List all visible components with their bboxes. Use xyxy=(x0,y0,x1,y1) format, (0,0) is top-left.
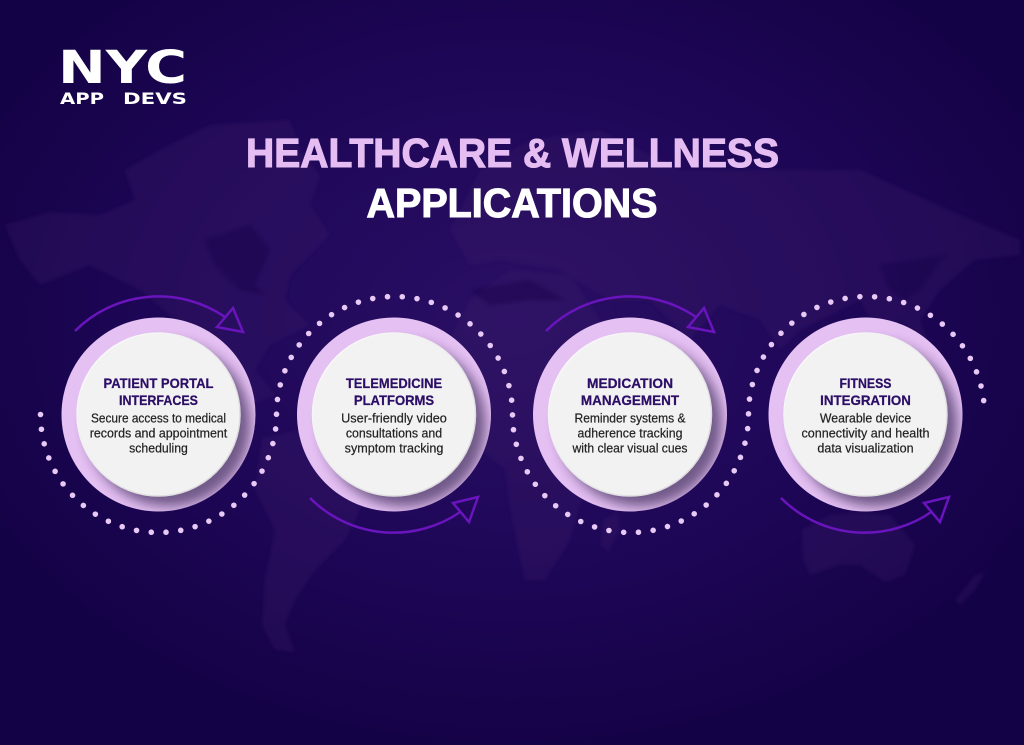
panel: fitness integration: connectivity and health xyxy=(802,426,930,440)
title xyxy=(246,130,779,226)
panel: patient portal interfaces: Secure access to medical xyxy=(91,412,226,426)
panel: telemedicine platforms: consultations and xyxy=(346,426,442,440)
panel: fitness integration: Wearable device xyxy=(820,412,911,426)
panel: patient portal interfaces: scheduling xyxy=(129,442,188,456)
dotted wave connector xyxy=(40,296,985,532)
panel: patient portal interfaces: records and appointment xyxy=(90,426,228,440)
panel: medication management: with clear visual cues xyxy=(572,442,688,456)
panel: medication management: adherence tracking xyxy=(578,426,683,440)
panel: medication management: MEDICATION xyxy=(587,375,673,391)
logo: NYC xyxy=(58,41,187,94)
panel: telemedicine platforms: TELEMEDICINE xyxy=(346,375,442,391)
arrow: patient portal xyxy=(75,296,243,332)
arrow: medication xyxy=(546,296,714,332)
panel: telemedicine platforms: symptom tracking xyxy=(345,442,443,456)
panel: telemedicine platforms: User-friendly video xyxy=(341,412,447,426)
logo: APP xyxy=(60,89,104,108)
panel: medication management: MANAGEMENT xyxy=(581,392,680,408)
panel: fitness integration: data visualization xyxy=(817,442,914,456)
panel: medication management xyxy=(533,318,727,512)
panel: fitness integration: FITNESS xyxy=(840,375,892,391)
world map xyxy=(5,120,1020,652)
logo: DEVS xyxy=(123,89,187,108)
panel: fitness integration xyxy=(768,318,962,512)
panel: telemedicine platforms xyxy=(297,318,491,512)
map dark seas xyxy=(205,225,945,305)
title: HEALTHCARE & WELLNESS xyxy=(246,130,779,176)
panel: telemedicine platforms: PLATFORMS xyxy=(354,392,434,408)
arrow: telemedicine xyxy=(310,497,478,533)
title: APPLICATIONS xyxy=(366,180,658,226)
panel: patient portal interfaces: PATIENT PORTAL xyxy=(104,375,214,391)
panel: medication management: Reminder systems & xyxy=(574,412,686,426)
arrow: fitness xyxy=(781,497,949,533)
panel: fitness integration: INTEGRATION xyxy=(820,392,911,408)
panel: patient portal interfaces: INTERFACES xyxy=(119,392,198,408)
panel: patient portal interfaces xyxy=(62,318,256,512)
logo xyxy=(58,41,187,108)
